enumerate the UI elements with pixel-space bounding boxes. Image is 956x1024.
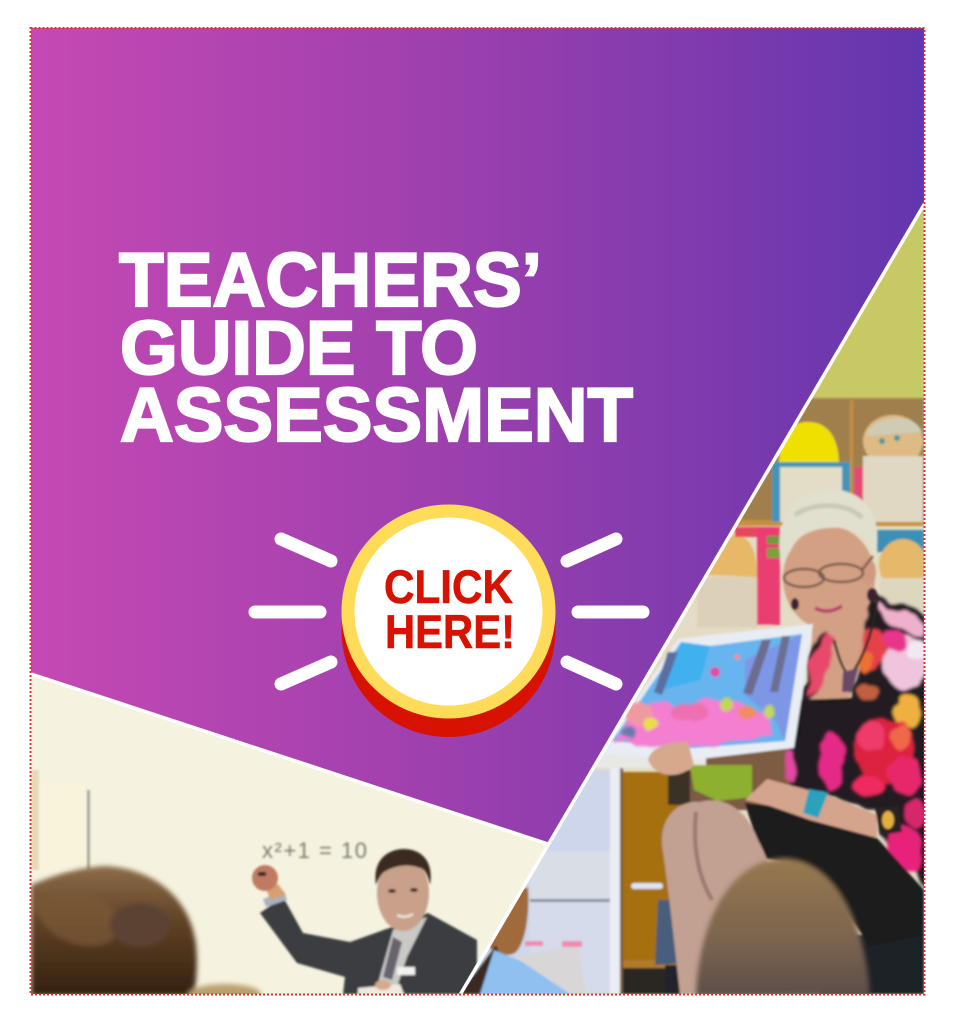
student and blue folder: [459, 888, 586, 994]
olive wall: [700, 200, 924, 399]
blurred student heads: [31, 866, 261, 1004]
floral jacket: [785, 590, 930, 892]
glasses: [784, 556, 873, 587]
title: GUIDE TO: [120, 306, 478, 391]
legs: [660, 798, 768, 994]
white diagonal divider lines: [31, 203, 925, 995]
green cloth: [690, 765, 752, 801]
hand on book: [648, 742, 694, 775]
blurred child head: [696, 858, 870, 996]
seat: [820, 935, 924, 994]
cabinet, table and door: [459, 745, 800, 994]
teacher: [252, 849, 477, 994]
title: TEACHERS’: [119, 238, 542, 323]
photo: teacher at whiteboard: [31, 670, 561, 1004]
equation on whiteboard: x²+1 = 10: [262, 838, 367, 863]
classroom paintings: [697, 398, 927, 630]
arm and watch: [745, 779, 877, 838]
picture book: [600, 624, 813, 760]
photo: teacher reading a picture book: [459, 200, 930, 1000]
title: ASSESSMENT: [120, 373, 633, 458]
black skirt: [745, 803, 924, 946]
radiating rays: [255, 539, 643, 684]
face and hair: [783, 526, 875, 630]
teacher: woman: [662, 489, 930, 994]
button label: HERE!: [385, 605, 515, 658]
title: [119, 238, 633, 458]
button label: [384, 560, 515, 658]
click here button: [255, 504, 643, 737]
button label: CLICK: [384, 560, 513, 613]
